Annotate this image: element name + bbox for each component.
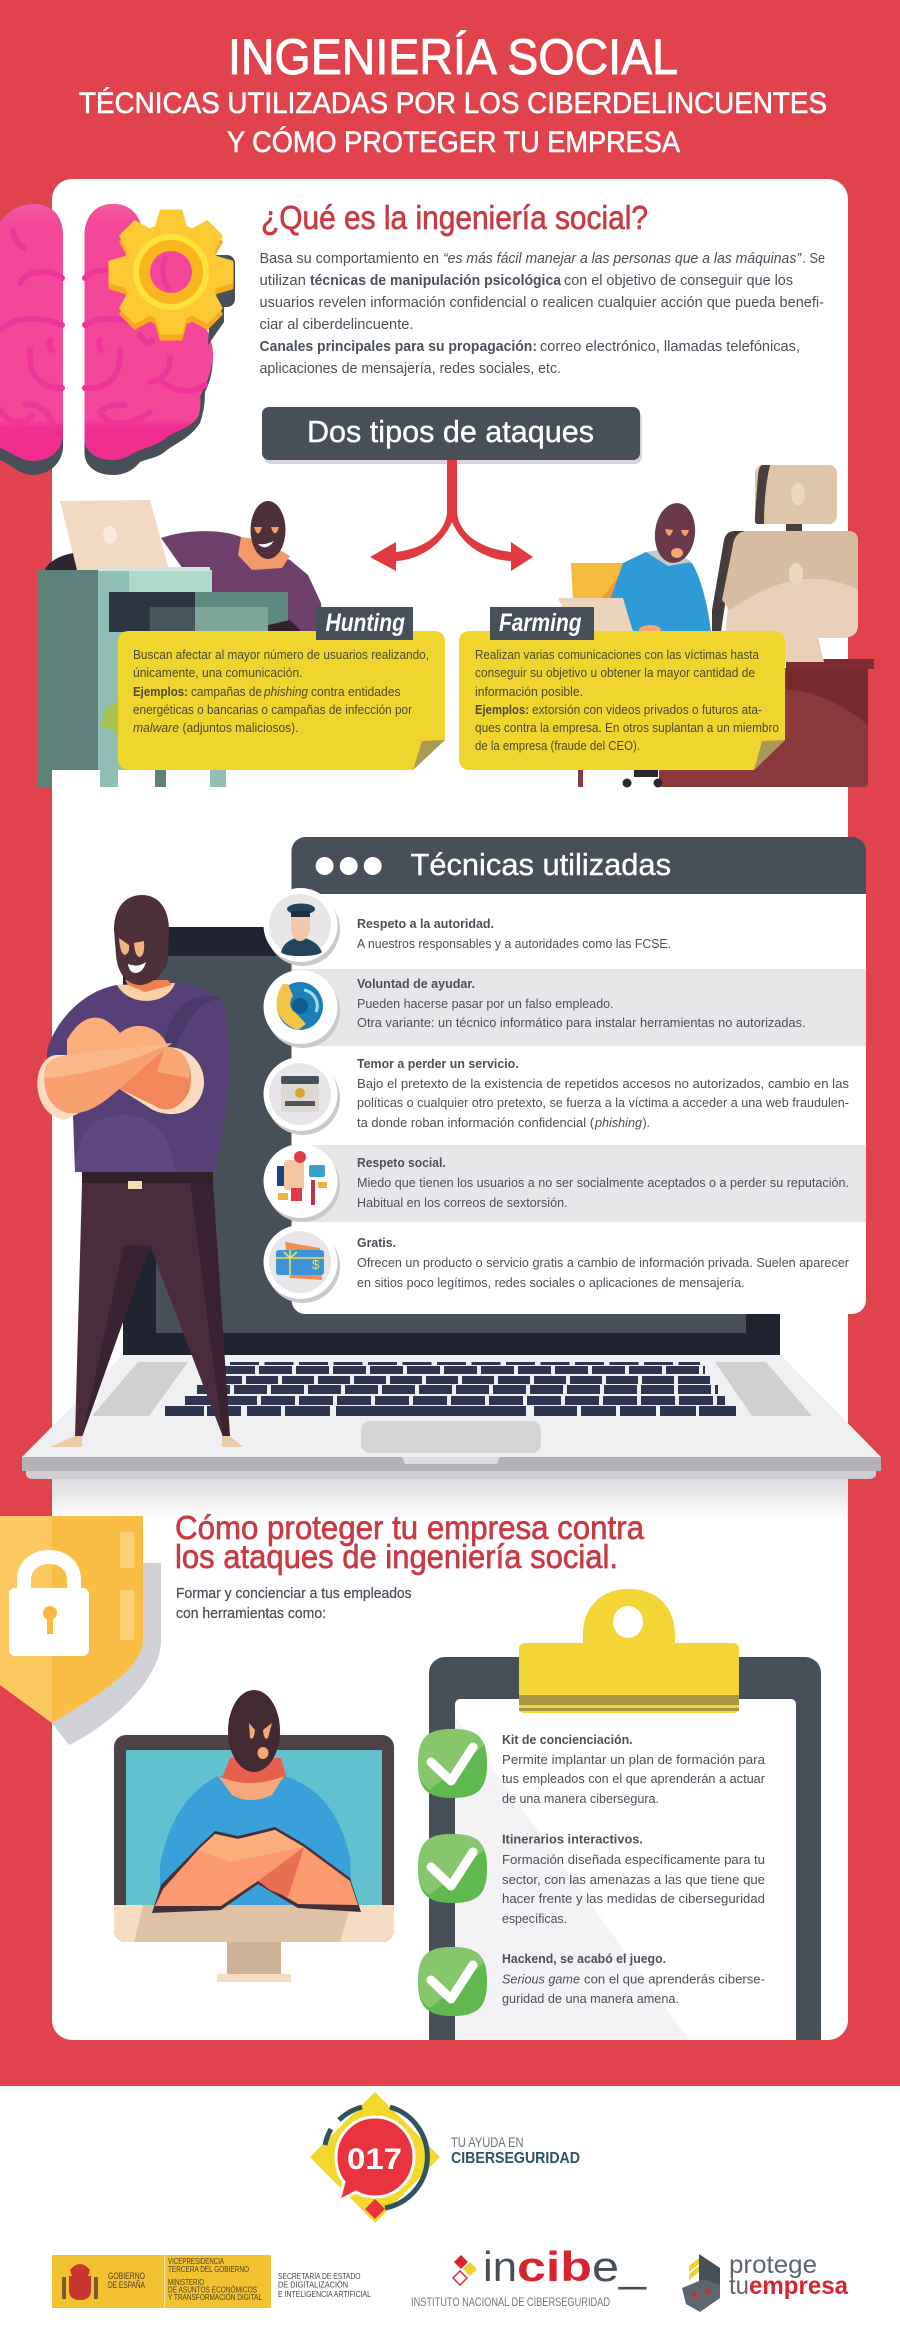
technique: social respect: Miedo que tienen los usuarios a no ser socialmente aceptados o a perder su reputación. [357,1175,849,1190]
text: interactive itineraries: hacer frente y las medidas de ciberseguridad [502,1891,765,1906]
technique: willingness to help: Pueden hacerse pasar por un falso empleado. [357,996,614,1011]
illustration: attacker with crossed arms [37,895,243,1447]
logo: 017 helpline: TU AYUDA EN [451,2134,524,2150]
intro text block: aplicaciones de mensajería, redes sociales, etc. [260,361,561,377]
intro text block: . Se [802,251,825,267]
card fold [413,740,445,770]
technique: social respect: Respeto social. [357,1155,446,1170]
desk [659,659,874,787]
hunting text: campañas de [191,684,262,699]
technique: social respect: Habitual en los correos de sextorsión. [357,1195,568,1210]
text: hackend: guridad de una manera amena. [502,1991,679,2006]
torso [160,1776,352,1905]
farming text: información posible. [475,684,583,699]
heading: how to protect your company: Cómo proteger tu empresa contra [175,1509,645,1546]
white content panel [52,179,848,2040]
neck [117,980,175,1001]
intro text block: utilizan [260,273,306,289]
logo: 017 helpline: 017 [347,2143,402,2176]
button: two types of attacks [262,407,642,464]
technique: authority [357,916,671,951]
logo: gobierno de españa: VICEPRESIDENCIA [168,2256,224,2266]
laptop [558,598,633,632]
check: interactive itineraries [418,1834,487,1903]
icon: gift card [264,1225,340,1303]
title: Y CÓMO PROTEGER TU EMPRESA [227,126,680,159]
logo: incibe: e_ [592,2243,647,2290]
check: awareness kit [418,1729,487,1798]
clipboard [418,1589,821,2040]
technique: free: en sitios poco legítimos, redes sociales o aplicaciones de mensajería. [357,1275,745,1290]
text: awareness kit [502,1732,766,1806]
brain right lobe [84,204,213,475]
technique: fear of losing a service [357,1056,849,1130]
logo: gobierno de españa: MINISTERIO [168,2277,204,2287]
intro text block: Basa su comportamiento en [260,251,439,267]
speakers [92,1362,188,1416]
intro text: train your employees: Formar y concienciar a tus empleados [176,1586,412,1602]
hunting text: Ejemplos: [133,684,188,699]
shoes [50,1436,82,1447]
farming text: Ejemplos: [475,702,529,717]
text: awareness kit: Permite implantar un plan de formación para [502,1752,766,1767]
hunting text: energéticas o bancarias o campañas de infección por [133,702,413,717]
technique: authority: Respeto a la autoridad. [357,916,494,931]
office chair [571,563,662,788]
hunting text: únicamente, una comunicación. [133,665,302,680]
logo: gobierno de españa: DE ESPAÑA [108,2280,145,2290]
heading: how to protect your company [175,1509,645,1575]
icon: gift card: $ [312,1257,320,1272]
text: awareness kit: Kit de concienciación. [502,1732,633,1747]
text: interactive itineraries: Formación diseñada específicamente para tu [502,1852,765,1867]
text: awareness kit: de una manera cibersegura. [502,1791,659,1806]
attacker head [250,501,286,559]
panel: techniques [264,837,866,1314]
technique: fear of losing a service: Temor a perder un servicio. [357,1056,519,1071]
computer monitor [60,500,169,570]
monitor [114,1735,394,1982]
filing cabinet [37,567,302,788]
brain left lobe [0,204,63,475]
intro text block: “es más fácil manejar a las personas que a las máquinas” [443,251,802,267]
logo: gobierno de españa: E INTELIGENCIA ARTIFICIAL [278,2289,371,2299]
intro text: train your employees [176,1586,412,1622]
panel body [292,894,866,1314]
technique: authority: A nuestros responsables y a autoridades como las FCSE. [357,936,671,951]
logo: incibe: in [483,2243,517,2290]
crossed arms [37,1018,204,1120]
check: hackend [418,1947,487,2016]
text: hackend: Serious game [502,1972,580,1986]
logo: incibe [411,2243,647,2309]
technique: fear of losing a service: Bajo el pretexto de la existencia de repetidos accesos no autorizados, cambio en las [357,1076,849,1091]
logo: 017 helpline: CIBERSEGURIDAD [451,2150,580,2167]
torso [47,983,230,1172]
icon: phone [264,970,340,1048]
intro text block: ciar al ciberdelincuente. [260,317,414,333]
coat of arms [62,2264,98,2300]
intro text block: Canales principales para su propagación: [260,339,537,355]
text: hackend: Hackend, se acabó el juego. [502,1951,666,1966]
illustration: laptop [22,927,881,1479]
logo: 017 helpline [310,2092,580,2223]
logo: gobierno de españa: Y TRANSFORMACIÓN DIGITAL [168,2292,262,2302]
belt [82,1170,213,1189]
illustration: hunting attacker at filing cabinet [37,500,324,788]
attacker head [646,501,698,566]
attacker torso [611,552,711,632]
logo: gobierno de españa: TERCERA DEL GOBIERNO [168,2264,249,2274]
tag: farming: Farming [499,609,582,637]
neck [222,1758,286,1792]
trackpad [361,1421,541,1453]
technique: fear of losing a service: políticas o cualquier otro pretexto, se fuerza a la víctima a acceder a una web fraudulen- [357,1095,849,1110]
attacker neck [238,537,290,570]
logo: protege tu empresa: protege [729,2251,817,2279]
panel header: Técnicas utilizadas [410,847,671,882]
logo: gobierno de españa: SECRETARÍA DE ESTADO [278,2271,361,2281]
illustration: farming attacker at desk [558,465,874,788]
icon: social [264,1144,340,1222]
hunting text: malware [133,720,179,735]
text: interactive itineraries: específicas. [502,1911,567,1926]
logo: gobierno de españa [52,2255,371,2308]
big monitor [712,531,858,662]
heading: what is social engineering: ¿Qué es la ingeniería social? [261,199,648,236]
icon: brain with gear [0,204,235,475]
text: hackend [502,1951,765,2006]
technique: social respect [357,1155,849,1210]
logo: gobierno de españa: DE DIGITALIZACIÓN [278,2280,348,2290]
title [79,29,827,159]
panel header [292,837,866,894]
text: awareness kit: tus empleados con el que aprenderán a actuar [502,1771,766,1786]
text: interactive itineraries: Itinerarios interactivos. [502,1832,643,1846]
head [114,895,169,985]
logo: protege tu empresa: empresa [749,2272,849,2300]
farming text: ques contra la empresa. En otros suplantan a un miembro [475,720,779,735]
gear [110,211,235,345]
logo: incibe: cib [517,2243,592,2290]
technique: free: Gratis. [357,1235,396,1250]
technique: willingness to help [357,976,806,1030]
attacker glove [43,552,82,585]
logo: protege tu empresa [682,2251,849,2312]
technique: fear of losing a service: ta donde roban información confidencial ( [357,1115,595,1130]
technique: free: Ofrecen un producto o servicio gratis a cambio de información privada. Suelen aparecer [357,1255,850,1270]
text: interactive itineraries: sector, con las amenazas a las que tiene que [502,1872,765,1887]
illustration: attacker in monitor [114,1690,394,1982]
hunting text: contra entidades [311,684,401,699]
attacker hand [639,625,661,635]
laptop base [22,1355,881,1457]
legs [75,1183,230,1437]
farming text: de la empresa (fraude del CEO). [475,738,640,753]
laptop screen [123,927,780,1357]
technique: fear of losing a service: ). [643,1115,650,1130]
icon: shield with lock [0,1516,161,1745]
intro text: train your employees: con herramientas como: [176,1606,326,1622]
technique: willingness to help: Voluntad de ayudar. [357,976,475,991]
icon: login window [264,1057,340,1135]
clip [519,1589,739,1713]
logo: incibe: INSTITUTO NACIONAL DE CIBERSEGURIDAD [411,2295,610,2309]
keyboard [165,1364,736,1411]
logo: gobierno de españa: DE ASUNTOS ECONÓMICOS [168,2284,257,2294]
tag: hunting: Hunting [326,609,405,637]
logo: gobierno de españa: GOBIERNO [108,2271,145,2281]
farming text: Realizan varias comunicaciones con las víctimas hasta [475,647,760,662]
button: two types of attacks: Dos tipos de ataques [307,414,594,449]
card: hunting [118,607,445,770]
text: interactive itineraries [502,1832,765,1926]
farming text [475,647,779,753]
intro text block: usuarios revelen información confidencial o realicen cualquier acción que pueda benefi- [260,295,824,311]
back monitor [755,465,837,534]
card: farming [459,607,785,770]
hunting text: Buscan afectar al mayor número de usuarios realizando, [133,647,429,662]
hunting text [133,647,429,735]
title: INGENIERÍA SOCIAL [228,29,678,85]
heading: how to protect your company: los ataques de ingeniería social. [175,1538,618,1575]
intro text block: correo electrónico, llamadas telefónicas, [540,339,800,355]
attacker body [161,531,324,640]
logo: protege tu empresa: tu [729,2272,749,2300]
title: TÉCNICAS UTILIZADAS POR LOS CIBERDELINCUENTES [79,87,827,120]
hunting text: phishing [263,684,309,699]
shadow under laptop [52,1479,848,1521]
text: hackend: con el que aprenderás ciberse- [584,1972,765,1986]
hunting text: (adjuntos maliciosos). [182,720,298,735]
technique: fear of losing a service: phishing [594,1115,643,1130]
arrow: splits towards hunting and farming [370,460,533,571]
farming text: extorsión con videos privados o futuros ata- [532,702,762,717]
arms [152,1827,361,1913]
intro text block: técnicas de manipulación psicológica [310,273,562,289]
technique: willingness to help: Otra variante: un técnico informático para instalar herramientas no autorizadas. [357,1015,806,1030]
head [228,1690,280,1772]
intro text block [260,251,825,377]
intro text block: con el objetivo de conseguir que los [564,273,793,289]
technique: free [357,1235,850,1290]
card fold [754,740,785,770]
icon: officer [264,888,340,966]
farming text: conseguir su objetivo u obtener la mayor cantidad de [475,665,755,680]
padlock [9,1557,89,1656]
